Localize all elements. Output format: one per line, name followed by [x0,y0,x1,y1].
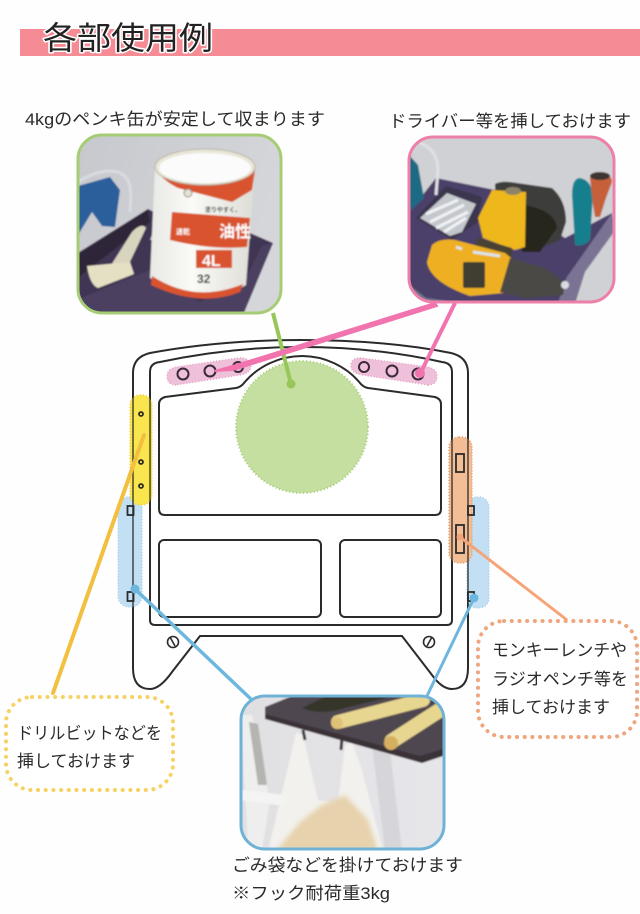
slots and hooks [128,412,474,601]
leader line: driver holes left [215,303,437,371]
photo: paint can on tray: 32 [197,272,211,286]
photo: bag on hooks [239,694,446,851]
drill body [427,240,516,296]
caption: bag hooks: ごみ袋などを掛けておけます [232,856,463,875]
wooden handles [338,700,423,722]
callout: drill bits [6,697,173,790]
leader line: driver holes right [415,303,455,378]
tray [407,178,614,304]
holes [178,362,424,380]
paint roller [111,224,147,264]
title bar [20,20,640,56]
callout: drill bits: 挿しておけます [17,752,135,771]
photo: paint can on tray [76,133,283,315]
stand [78,177,120,235]
callout: wrench [478,621,637,737]
photo: paint can on tray: 油性 [219,222,251,241]
callout: wrench: 挿しておけます [492,698,610,717]
screw left [168,636,178,648]
drill battery [478,190,526,250]
side rail lines [133,395,468,608]
caption: screwdrivers: ドライバー等を挿しておけます [389,112,631,131]
tray [264,698,442,758]
tray inner outline [150,347,452,625]
caption: paint can: 4kgのペンキ缶が安定して収まります [25,110,325,129]
lower right compartment [340,540,441,617]
hooks [303,730,342,750]
screwdriver [572,178,593,245]
callout: drill bits: ドリルビットなどを [17,724,162,743]
caption: bag hooks [232,856,463,903]
leader line: hook left [130,584,253,701]
callout: wrench: モンキーレンチや [492,641,627,660]
leader line: wrench [456,534,567,620]
zone: drill bits [130,395,152,505]
zone: hooks right [467,497,489,608]
zone: hooks left [118,497,142,607]
photo border [409,137,614,302]
screw right [424,636,434,648]
photo border [241,696,444,849]
lower left compartment [159,540,321,617]
large compartment [159,356,441,515]
leader line: drill bits [53,435,144,693]
tray body [80,208,273,303]
photo: paint can on tray: 速乾 [176,227,190,236]
zone: paint can circle [236,361,368,493]
chrome handle and blue stand [420,143,438,195]
photo border [78,135,281,313]
photo: paint can on tray: 4L [202,253,221,270]
callout: wrench: ラジオペンチ等を [492,670,628,689]
photo: drill and screwdrivers [407,135,616,304]
tray outer outline [133,340,468,689]
title: 各部使用例 [43,20,213,56]
screw box [416,186,482,240]
caption: bag hooks: ※フック耐荷重3kg [232,884,390,903]
zone: driver holes left [167,358,251,385]
leader line: paint can [273,313,296,388]
charger [495,182,566,252]
ladder [241,715,270,849]
can [150,167,255,296]
zone: wrench slots [449,437,472,563]
photo: paint can on tray: 塗りやすく、 [205,206,241,214]
leader line: hook right [426,594,478,698]
diagram: tool tray outline and zones [118,340,489,689]
zone: driver holes right [351,358,437,385]
plastic bag [268,733,383,851]
